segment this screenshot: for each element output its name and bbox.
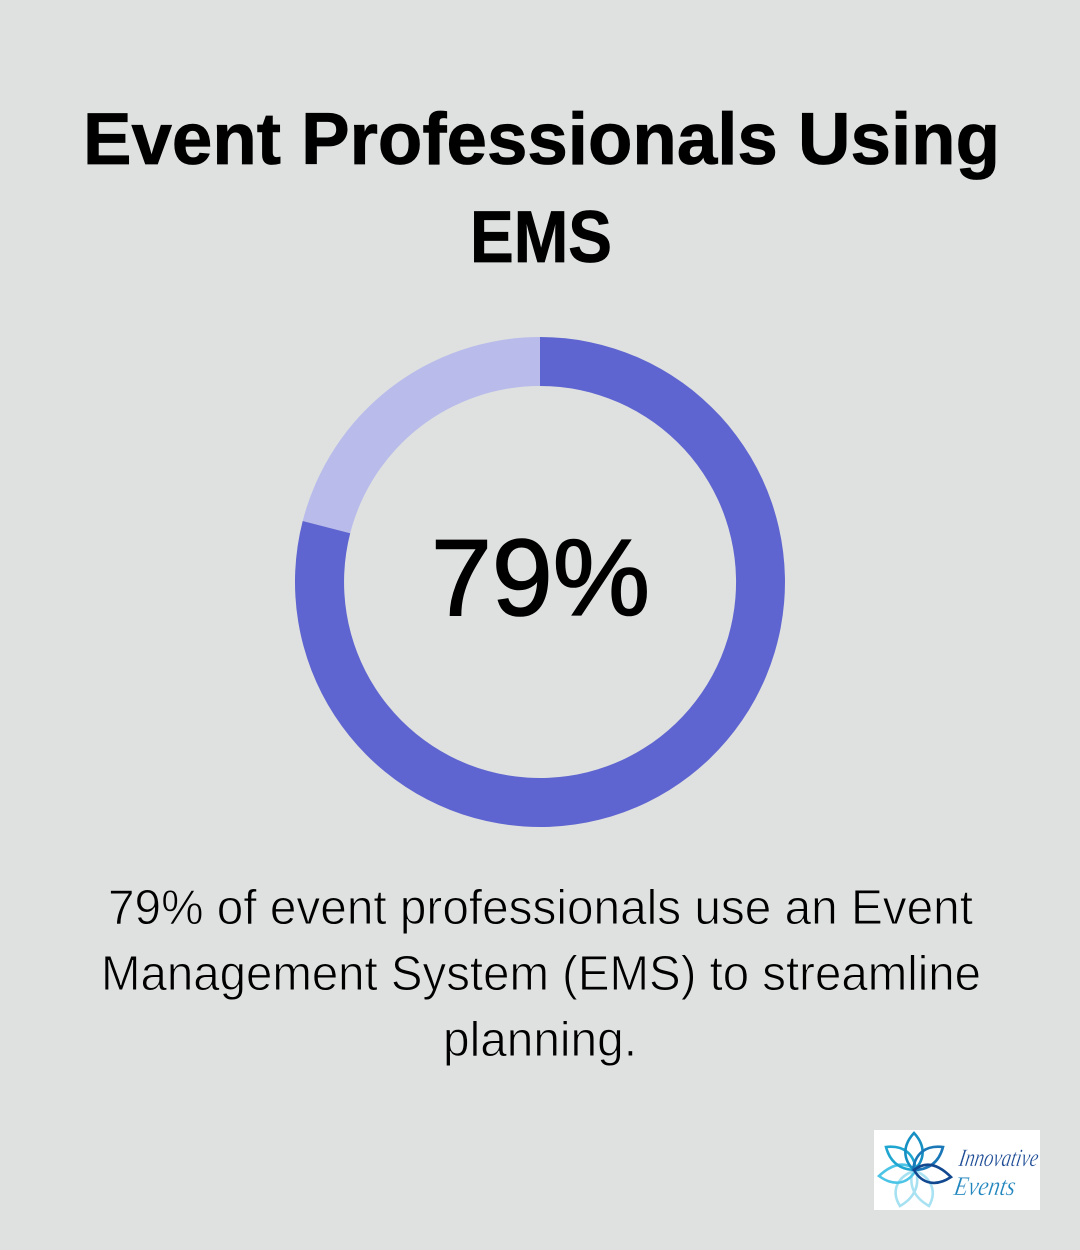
logo wordmark: Events xyxy=(951,1171,1018,1201)
logo wordmark: Innovative xyxy=(956,1145,1041,1172)
donut chart: 79% xyxy=(295,337,785,827)
donut remainder segment: 21% xyxy=(303,337,540,533)
title: Event Professionals Using xyxy=(83,99,1000,180)
description text: Management System (EMS) to streamline xyxy=(101,947,981,1001)
title: EMS xyxy=(470,197,612,278)
description text xyxy=(101,881,981,1067)
donut value segment: 79% xyxy=(295,337,785,827)
logo: Innovative Events xyxy=(874,1130,1041,1210)
donut center value: 79% xyxy=(431,517,650,639)
title xyxy=(83,99,1000,278)
description text: planning. xyxy=(443,1013,637,1067)
description text: 79% of event professionals use an Event xyxy=(108,881,973,935)
icon: lotus flower xyxy=(879,1133,951,1206)
logo wordmark xyxy=(951,1145,1041,1201)
